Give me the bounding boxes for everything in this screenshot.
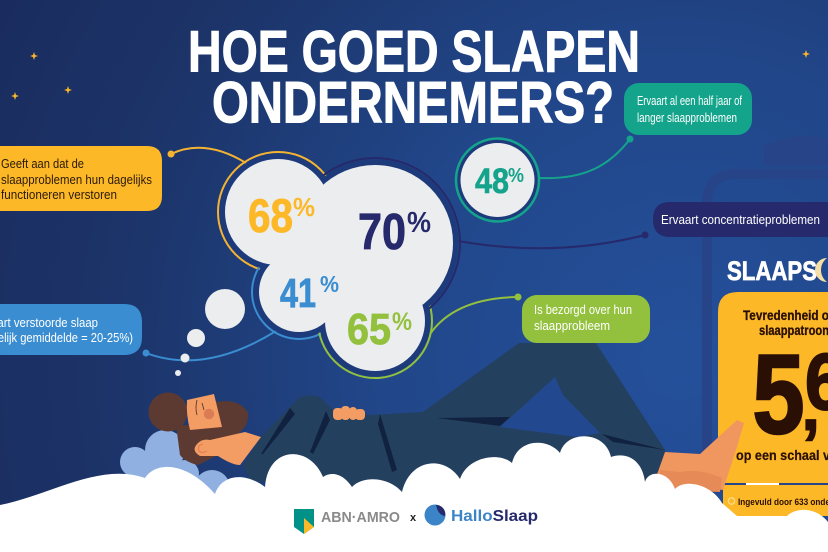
label: half year: langer slaapproblemen [637, 111, 737, 125]
value 65%: 65 [347, 305, 391, 354]
cheek [204, 409, 214, 419]
label: half year: Ervaart al een half jaar of [637, 94, 742, 108]
connector: green [430, 294, 522, 334]
foot [655, 420, 744, 490]
connector lines [142, 136, 648, 360]
separator x: x [410, 512, 417, 524]
gap under the raised leg [500, 377, 600, 437]
white circles [225, 143, 534, 371]
sleeping man [120, 343, 744, 506]
moon icon [815, 258, 827, 282]
value 48%: % [508, 165, 524, 187]
logo: ABN AMRO shield [294, 509, 314, 534]
bottle cap [764, 136, 828, 166]
label: concentration [653, 202, 828, 237]
foot shade [658, 470, 722, 492]
connector: navy [458, 232, 648, 248]
label: functioning: functioneren verstoren [1, 188, 117, 202]
score value: , [801, 367, 820, 445]
pillow [120, 430, 230, 506]
value 48%: 48 [475, 162, 509, 201]
footnote panel [723, 485, 828, 516]
thought bubble circles [175, 289, 245, 376]
hair [148, 392, 188, 432]
info icon [728, 498, 735, 504]
connector: teal [539, 136, 634, 178]
panel heading [743, 308, 828, 338]
face [187, 394, 222, 430]
title [188, 20, 640, 136]
foreground clouds [0, 436, 828, 552]
stars [11, 50, 810, 100]
trouser shadows [261, 408, 665, 472]
ear [198, 444, 207, 452]
label: functioning [0, 146, 162, 211]
label: functioning: Geeft aan dat de [1, 157, 84, 171]
logo: ABN AMRO wordmark: ABN·AMRO [321, 509, 400, 526]
label: half year [624, 83, 752, 135]
label: worried: slaapprobleem [534, 319, 610, 333]
value 68%: % [293, 192, 315, 222]
coloured rings [218, 138, 539, 378]
score value: 5 [752, 332, 804, 457]
bottle outline [707, 174, 828, 488]
title: ONDERNEMERS? [212, 70, 614, 136]
logos [294, 504, 538, 534]
title: HOE GOED SLAPEN [188, 20, 640, 84]
value 41%: 41 [280, 270, 316, 316]
white divider piece [746, 483, 779, 486]
dark outline layer [220, 140, 538, 376]
bottle with sleep score [707, 136, 828, 516]
label: worried [522, 295, 650, 343]
eye [196, 400, 204, 415]
label: concentration: Ervaart concentratieproblemen [661, 213, 820, 227]
connector: yellow [168, 148, 246, 163]
hand [333, 406, 365, 420]
neck [195, 432, 261, 465]
logo: HalloSlaap mark [424, 504, 446, 526]
label: functioning: slaapproblemen hun dagelijks [1, 173, 152, 187]
logo: HalloSlaap wordmark: HalloSlaap [451, 508, 538, 525]
score panel [718, 292, 828, 483]
value 68%: 68 [248, 189, 293, 242]
thought cloud [218, 138, 539, 378]
value 41%: % [320, 271, 339, 297]
label: disturbed sleep [0, 304, 142, 355]
connector: blue [142, 331, 276, 360]
label: worried: Is bezorgd over hun [534, 303, 632, 317]
value 65%: % [392, 308, 412, 336]
value 70%: % [407, 207, 431, 239]
leg and torso [243, 343, 680, 500]
value 70%: 70 [358, 203, 406, 260]
beard [176, 401, 248, 465]
